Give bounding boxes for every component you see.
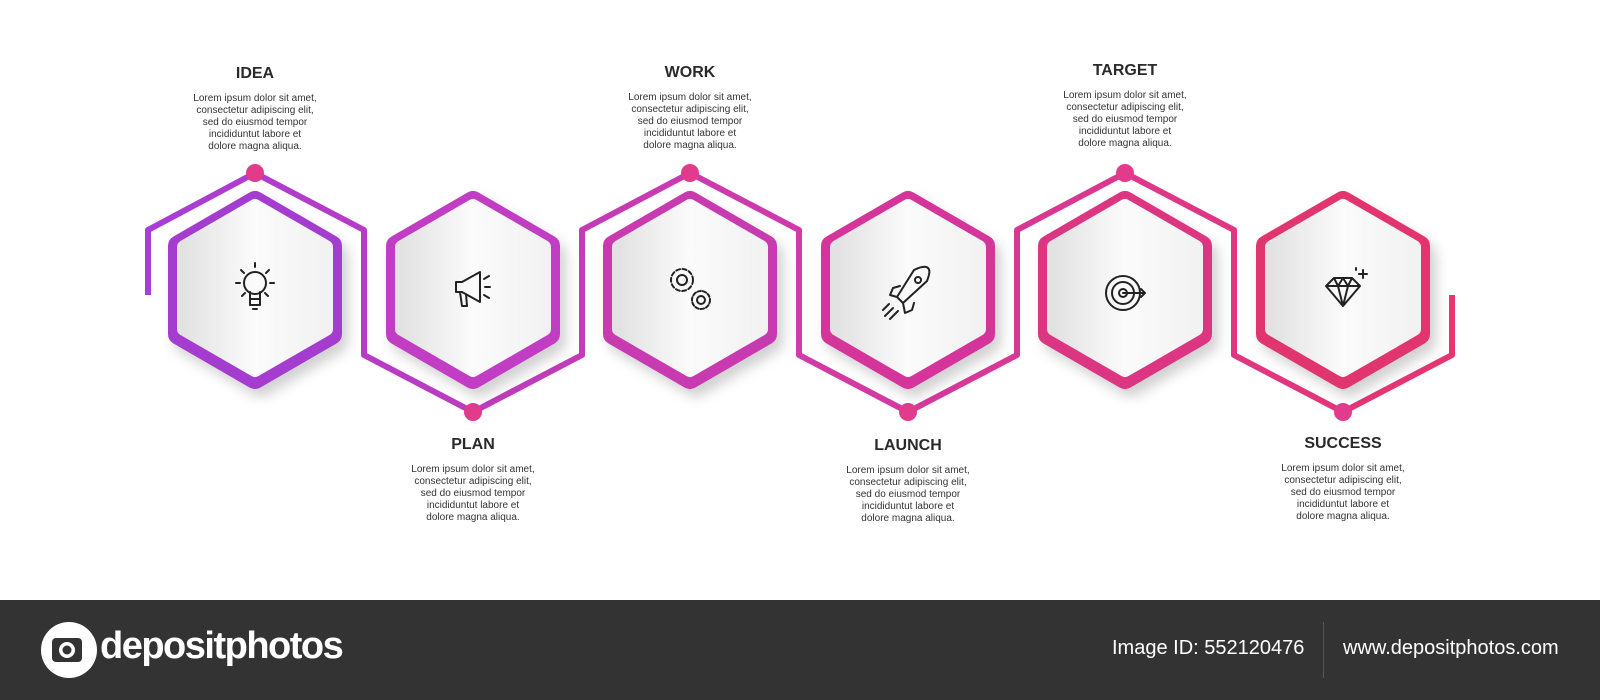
hexagon 5 xyxy=(1049,202,1201,378)
text: target: dolore magna aliqua. xyxy=(1078,138,1172,149)
hexagon 1 xyxy=(179,202,331,378)
text: success: Lorem ipsum dolor sit amet, xyxy=(1281,463,1405,474)
text: target: Lorem ipsum dolor sit amet, xyxy=(1063,90,1187,101)
text: plan: consectetur adipiscing elit, xyxy=(414,476,532,487)
footer bar xyxy=(0,600,1600,700)
icon: megaphone xyxy=(456,272,490,306)
text: work: incididuntut labore et xyxy=(644,128,736,139)
text: work: sed do eiusmod tempor xyxy=(638,116,742,127)
text: success xyxy=(1281,435,1405,522)
text: idea xyxy=(193,65,317,152)
icon: bulb xyxy=(236,263,274,309)
hexagon 6 xyxy=(1267,202,1419,378)
text: success: incididuntut labore et xyxy=(1297,499,1389,510)
text: idea: incididuntut labore et xyxy=(209,129,301,140)
text: plan: sed do eiusmod tempor xyxy=(421,488,525,499)
text: plan xyxy=(411,436,535,523)
text: launch xyxy=(846,437,970,524)
connector line xyxy=(148,173,1452,412)
text: launch: incididuntut labore et xyxy=(862,501,954,512)
text: target: TARGET xyxy=(1093,62,1157,79)
text: work: WORK xyxy=(665,64,715,81)
text: plan: incididuntut labore et xyxy=(427,500,519,511)
text: plan: dolore magna aliqua. xyxy=(426,512,520,523)
text: target: incididuntut labore et xyxy=(1079,126,1171,137)
text: idea: Lorem ipsum dolor sit amet, xyxy=(193,93,317,104)
hexagon 3 xyxy=(614,202,766,378)
icon: rocket xyxy=(883,267,929,319)
text: target: sed do eiusmod tempor xyxy=(1073,114,1177,125)
website: www.depositphotos.com xyxy=(1343,637,1559,659)
icon: diamond xyxy=(1326,268,1367,306)
text: success: dolore magna aliqua. xyxy=(1296,511,1390,522)
text: success: SUCCESS xyxy=(1304,435,1382,452)
dots xyxy=(246,164,1352,421)
text: work: consectetur adipiscing elit, xyxy=(631,104,749,115)
text: launch: LAUNCH xyxy=(874,437,942,454)
text: target xyxy=(1063,62,1187,149)
text: work: dolore magna aliqua. xyxy=(643,140,737,151)
text: target: consectetur adipiscing elit, xyxy=(1066,102,1184,113)
hexagon 2 xyxy=(397,202,549,378)
text: launch: sed do eiusmod tempor xyxy=(856,489,960,500)
text: launch: dolore magna aliqua. xyxy=(861,513,955,524)
text: launch: consectetur adipiscing elit, xyxy=(849,477,967,488)
icon: target xyxy=(1106,276,1145,310)
text: plan: PLAN xyxy=(451,436,495,453)
text: work: Lorem ipsum dolor sit amet, xyxy=(628,92,752,103)
logo xyxy=(41,622,342,678)
icon: gears xyxy=(671,269,710,309)
text: work xyxy=(628,64,752,151)
image id: Image ID: 552120476 xyxy=(1112,637,1304,659)
text: idea: consectetur adipiscing elit, xyxy=(196,105,314,116)
text: plan: Lorem ipsum dolor sit amet, xyxy=(411,464,535,475)
text: idea: IDEA xyxy=(236,65,274,82)
text: idea: dolore magna aliqua. xyxy=(208,141,302,152)
text: success: sed do eiusmod tempor xyxy=(1291,487,1395,498)
logo: depositphotos xyxy=(100,625,342,667)
text: success: consectetur adipiscing elit, xyxy=(1284,475,1402,486)
text: launch: Lorem ipsum dolor sit amet, xyxy=(846,465,970,476)
hexagon 4 xyxy=(832,202,984,378)
text: idea: sed do eiusmod tempor xyxy=(203,117,307,128)
